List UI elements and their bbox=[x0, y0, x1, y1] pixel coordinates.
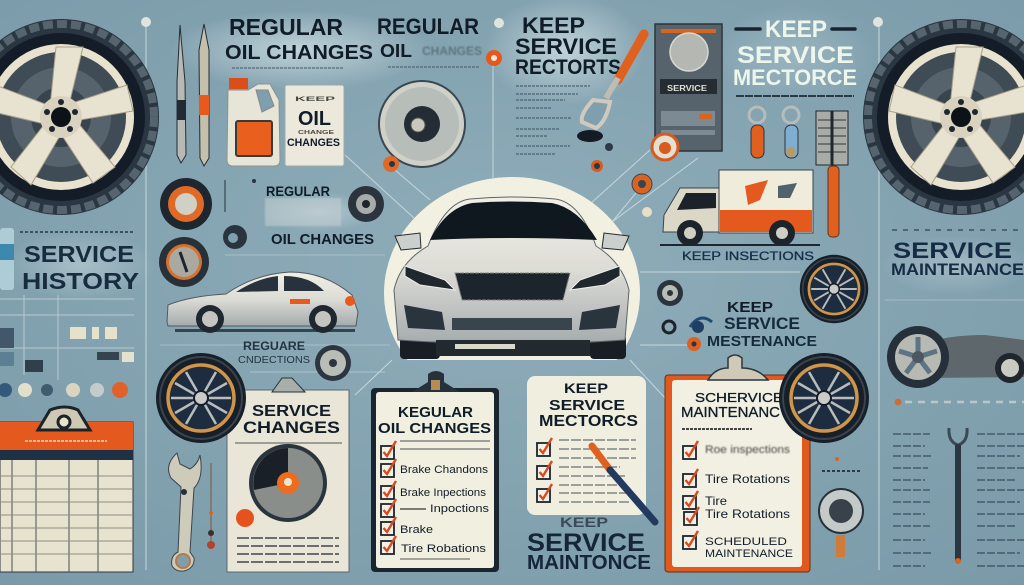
fuzzy body lines bbox=[516, 86, 590, 154]
label: regular inspections: REGUARE bbox=[243, 339, 305, 353]
heading: keep service maintonce bbox=[527, 514, 651, 574]
heading: keep service records: RECTORTS bbox=[515, 56, 621, 79]
icon: side view car bbox=[167, 272, 358, 333]
heading: service maintenance right: SERVICE bbox=[893, 238, 1012, 263]
heading: keep service maintonce: MAINTONCE bbox=[527, 552, 651, 574]
oil label card bbox=[285, 85, 344, 166]
icon: pen bbox=[592, 446, 655, 522]
panel: scheduled maintenance clipboard: Tire Rotations bbox=[705, 507, 790, 521]
heading: keep service mectorce: MECTORCE bbox=[733, 65, 857, 90]
panel: service changes card: SERVICE bbox=[252, 403, 331, 420]
heading: keep service maintonce: KEEP bbox=[560, 514, 608, 530]
label: regular inspections: CNDECTIONS bbox=[238, 355, 310, 366]
icon: pens bbox=[177, 24, 209, 166]
panel: service changes card: CHANGES bbox=[243, 418, 340, 437]
icon: left gauge bottom bbox=[159, 237, 209, 287]
icon: orange pin bbox=[486, 50, 502, 66]
heading: regular oil: REGULAR bbox=[377, 14, 479, 39]
icon: right column dot row bbox=[894, 398, 1024, 406]
icon: wheel on card bbox=[156, 353, 246, 443]
label: keep inspections: KEEP INSECTIONS bbox=[682, 249, 814, 263]
icon: right small car with wheel bbox=[887, 326, 1024, 388]
panel: scheduled maintenance clipboard: MAINTENANC bbox=[681, 404, 780, 421]
icon: orange disc bbox=[652, 134, 678, 160]
panel: keep service mectorcs card: KEEP bbox=[564, 380, 608, 396]
panel: service card: SERVICE bbox=[667, 84, 708, 93]
icon: eye gear bbox=[687, 318, 712, 351]
heading: keep service records bbox=[515, 13, 621, 79]
icon: bolt disc bbox=[348, 186, 384, 222]
heading: regular oil: CHANGES bbox=[422, 44, 482, 58]
icon: round gauge bbox=[315, 345, 351, 381]
heading: regular oil changes: OIL CHANGES bbox=[225, 42, 373, 64]
icon: left gauge top bbox=[160, 178, 212, 230]
panel: scheduled maintenance clipboard: Roe inspections bbox=[705, 444, 791, 456]
icon: key fob blue bbox=[783, 107, 799, 158]
panel: regular oil changes clipboard: Brake Chandons bbox=[400, 464, 489, 476]
label: regular inspections bbox=[238, 339, 310, 366]
heading: keep service mestenance: KEEP bbox=[727, 299, 773, 316]
panel: service changes card bbox=[227, 378, 349, 572]
icon: right wrench bbox=[949, 428, 967, 564]
panel: scheduled maintenance clipboard: Tire bbox=[705, 494, 727, 508]
heading: keep service mectorce bbox=[733, 16, 857, 96]
icon: round parts bbox=[657, 280, 683, 333]
panel: keep service mectorcs card: MECTORCS bbox=[539, 413, 638, 430]
heading: service history bbox=[20, 232, 139, 294]
icon: gauge with stem bbox=[819, 457, 863, 557]
heading: service maintenance right: MAINTENANCE bbox=[891, 260, 1024, 279]
icon: middle wheel bbox=[800, 255, 868, 323]
icon: wrench bbox=[169, 453, 201, 571]
heading: keep service mestenance: SERVICE bbox=[724, 314, 800, 333]
panel: scheduled maintenance clipboard: MAINTENANCE bbox=[705, 548, 793, 560]
panel: regular oil changes clipboard: Brake Inpections bbox=[400, 487, 487, 499]
heading: regular oil changes: REGULAR bbox=[229, 14, 343, 40]
heading: keep service mestenance: MESTENANCE bbox=[707, 333, 817, 350]
panel: regular oil changes clipboard: KEGULAR bbox=[398, 404, 473, 421]
heading: keep service mestenance bbox=[707, 299, 817, 350]
oil label card: KEEP bbox=[295, 97, 335, 103]
heading: service history: HISTORY bbox=[22, 268, 139, 294]
icon: wheel on clipboard bbox=[779, 353, 869, 443]
oil label card: CHANGES bbox=[287, 137, 340, 149]
regular oil changes middle label: OIL CHANGES bbox=[271, 231, 374, 248]
icon: small parts bbox=[223, 179, 256, 249]
right column text lines left bbox=[893, 434, 932, 566]
heading: service history: SERVICE bbox=[24, 241, 134, 267]
oil label card: CHANGE bbox=[298, 130, 335, 136]
panel: regular oil changes clipboard: Inpoctions bbox=[430, 503, 490, 515]
panel: scheduled maintenance clipboard: SCHEDULED bbox=[705, 536, 787, 548]
faint sub lines bbox=[232, 67, 480, 68]
icon: delivery truck bbox=[660, 170, 820, 246]
icon: oil jug bbox=[227, 78, 280, 166]
icon: central car front view bbox=[394, 197, 629, 359]
regular oil changes middle label: REGULAR bbox=[266, 183, 330, 199]
icon: brush bbox=[816, 111, 848, 237]
panel: scheduled maintenance clipboard bbox=[665, 355, 810, 572]
panel: service card bbox=[655, 24, 722, 151]
heading: regular oil bbox=[377, 14, 482, 61]
panel: keep service mectorcs card: SERVICE bbox=[549, 397, 625, 414]
panel: service history table fragment bbox=[0, 295, 134, 398]
icon: key fob orange bbox=[749, 107, 765, 158]
central car spotlight bbox=[384, 177, 640, 360]
icon: brake disc bbox=[379, 81, 465, 167]
heading: keep service maintonce: SERVICE bbox=[527, 529, 645, 557]
heading: keep service mectorce: SERVICE bbox=[737, 42, 854, 69]
right column text lines right bbox=[977, 434, 1024, 566]
left tyre wheel bbox=[0, 19, 159, 215]
heading: regular oil changes bbox=[225, 14, 373, 64]
panel: scheduled maintenance clipboard: Tire Rotations bbox=[705, 472, 790, 486]
panel: keep service mectorcs card bbox=[527, 376, 646, 515]
heading: keep service mectorce: KEEP bbox=[765, 16, 827, 43]
panel: regular oil changes clipboard bbox=[371, 371, 499, 572]
icon: wrench spoon bbox=[577, 34, 644, 151]
heading: regular oil: OIL bbox=[380, 41, 412, 61]
panel: regular oil changes clipboard: Tire Robations bbox=[401, 543, 487, 555]
icon: small orange rings bbox=[591, 160, 652, 217]
heading: service maintenance right bbox=[891, 230, 1024, 279]
heading: keep service records: SERVICE bbox=[515, 34, 617, 59]
icon: orange pin on disc line bbox=[383, 156, 399, 172]
right tyre wheel bbox=[863, 19, 1024, 215]
node dots bbox=[141, 17, 883, 28]
icon: tool pin bbox=[207, 463, 215, 549]
panel: schedule table bbox=[0, 407, 133, 572]
heading: keep service records: KEEP bbox=[522, 13, 585, 38]
panel: regular oil changes clipboard: Brake bbox=[400, 524, 433, 536]
icon: bottle fragment bbox=[0, 228, 14, 290]
regular oil changes middle label bbox=[265, 183, 374, 248]
oil label card: OIL bbox=[298, 108, 331, 130]
heading glows bbox=[5, 0, 1024, 300]
panel: scheduled maintenance clipboard: SCHERVICE bbox=[695, 390, 783, 405]
panel: regular oil changes clipboard: OIL CHANGES bbox=[378, 420, 491, 437]
